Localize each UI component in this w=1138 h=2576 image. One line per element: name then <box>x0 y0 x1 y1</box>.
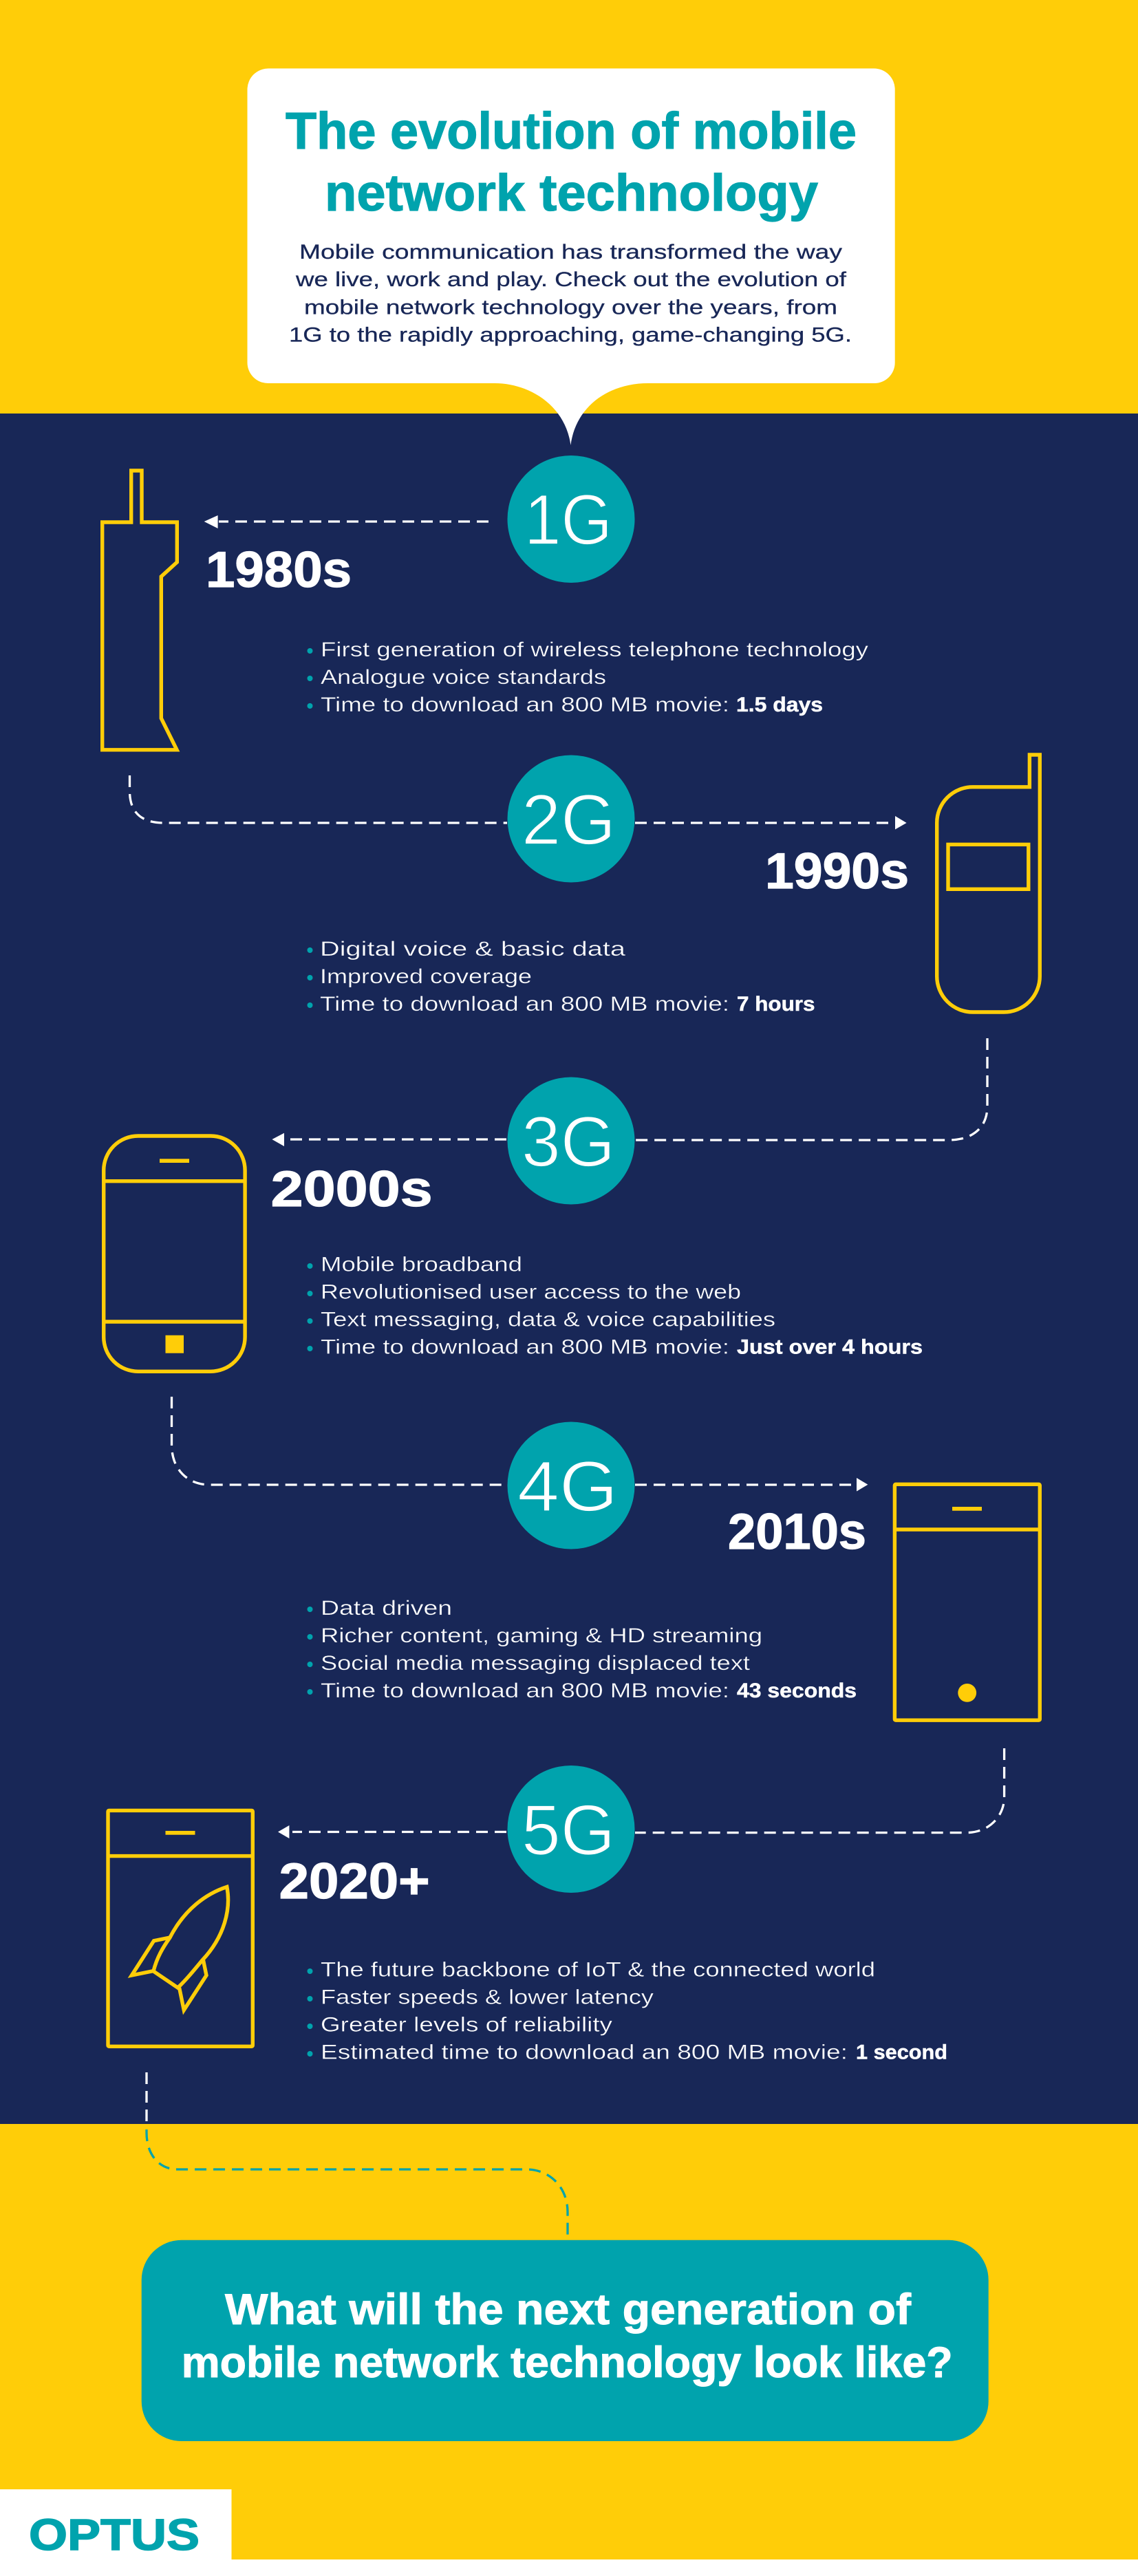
connector: 1980s phone to 2G <box>129 775 507 823</box>
bullet list: 2G: Time to download an 800 MB movie: <box>320 993 729 1016</box>
bullet list: 3G: Just over 4 hours <box>737 1336 923 1359</box>
navy timeline panel <box>0 414 1138 2125</box>
arrow: 2G to 1990s phone <box>635 816 907 830</box>
icon: 1980s brick phone <box>103 471 177 750</box>
bullet list: 5G: Faster speeds & lower latency <box>321 1986 654 2009</box>
2G badge <box>508 755 634 882</box>
section: 4G <box>172 1397 1040 1720</box>
bullet list: 3G: Mobile broadband <box>321 1254 522 1276</box>
bullet list: 5G <box>307 1959 947 2064</box>
section: 5G <box>108 1748 1005 2064</box>
top yellow background <box>0 0 1138 414</box>
bullet list: 4G: 43 seconds <box>737 1679 857 1702</box>
3G badge <box>508 1077 634 1204</box>
title: network technology <box>325 164 818 222</box>
bullet list: 5G: Estimated time to download an 800 MB movie: <box>321 2041 848 2064</box>
bullet list: 4G: Richer content, gaming & HD streaming <box>321 1624 762 1647</box>
4G badge: 4G <box>517 1447 618 1527</box>
call to action text <box>182 2286 953 2387</box>
intro text <box>289 241 852 347</box>
bullet list: 5G: Greater levels of reliability <box>321 2014 612 2037</box>
bullet list: 5G: 1 second <box>856 2041 947 2064</box>
header speech bubble <box>248 68 895 445</box>
2G badge: 2G <box>522 780 616 860</box>
heading: 1990s: 1990s <box>765 844 909 899</box>
5G badge <box>508 1765 634 1893</box>
arrow: 5G to 2020+ phone <box>278 1825 506 1838</box>
bullet list: 3G: Time to download an 800 MB movie: <box>321 1336 729 1359</box>
heading: 2000s: 2000s <box>271 1161 433 1217</box>
bullet list: 4G <box>307 1597 857 1702</box>
logo: Optus <box>0 2489 231 2576</box>
call to action text: mobile network technology look like? <box>182 2339 953 2387</box>
title: The evolution of mobile <box>286 102 857 160</box>
bullet list: 4G: Time to download an 800 MB movie: <box>321 1679 729 1702</box>
bullet list: 3G: Revolutionised user access to the web <box>321 1281 741 1304</box>
1G badge: 1G <box>524 480 612 560</box>
icon: 1990s mobile phone <box>937 755 1040 1012</box>
intro text: we live, work and play. Check out the evolution of <box>295 268 847 291</box>
connector: 2000s phone to 4G <box>172 1397 507 1485</box>
bullet list: 5G: The future backbone of IoT & the connected world <box>321 1959 875 1982</box>
intro text: 1G to the rapidly approaching, game-changing 5G. <box>289 323 852 347</box>
section: 3G <box>104 1038 987 1371</box>
icon: 2020+ phone with rocket <box>108 1810 253 2046</box>
bullet list: 1G: Time to download an 800 MB movie: <box>321 694 729 716</box>
bullet list: 2G: Improved coverage <box>320 965 532 988</box>
bullet list: 1G: 1.5 days <box>736 694 823 716</box>
bullet list: 4G: Social media messaging displaced text <box>321 1652 751 1675</box>
heading: 2020+: 2020+ <box>279 1854 430 1909</box>
bullet list: 1G <box>307 638 868 716</box>
heading: 2010s: 2010s <box>728 1504 866 1560</box>
bullet list: 1G: Analogue voice standards <box>321 666 606 689</box>
5G badge: 5G <box>522 1791 615 1871</box>
bullet list: 1G: First generation of wireless telephone technology <box>321 638 868 661</box>
intro text: Mobile communication has transformed the way <box>299 241 842 264</box>
intro text: mobile network technology over the years, from <box>304 296 837 319</box>
connector: 2010s phone to 5G <box>635 1748 1005 1833</box>
connector: 2020+ phone to call to action <box>147 2072 568 2240</box>
icon: rocket <box>131 1887 228 2010</box>
arrow: 1G to 1980s phone <box>204 515 489 528</box>
bullet list: 2G: Digital voice & basic data <box>320 938 625 960</box>
bullet list: 3G <box>307 1254 923 1359</box>
logo: Optus: OPTUS <box>29 2510 200 2559</box>
section: 2G <box>129 755 1040 1016</box>
arrow: 3G to 2000s phone <box>272 1133 506 1146</box>
icon: 2000s smartphone <box>104 1136 245 1371</box>
bullet list: 2G <box>307 938 815 1016</box>
call to action panel <box>142 2240 989 2441</box>
4G badge <box>508 1421 634 1549</box>
connector: 1990s phone to 3G <box>635 1038 987 1140</box>
1G badge <box>508 455 634 583</box>
bullet list: 3G: Text messaging, data & voice capabilities <box>321 1309 775 1331</box>
arrow: 4G to 2010s phone <box>635 1478 868 1492</box>
bubble shape <box>248 68 895 445</box>
icon: 2010s smartphone <box>894 1484 1040 1720</box>
3G badge: 3G <box>522 1102 615 1182</box>
heading: 1980s: 1980s <box>206 542 352 598</box>
bullet list: 2G: 7 hours <box>737 993 815 1016</box>
bottom yellow background <box>0 2124 1138 2559</box>
bullet list: 4G: Data driven <box>321 1597 452 1620</box>
call to action text: What will the next generation of <box>225 2286 912 2334</box>
section: 1G <box>103 455 868 750</box>
title <box>286 102 857 222</box>
